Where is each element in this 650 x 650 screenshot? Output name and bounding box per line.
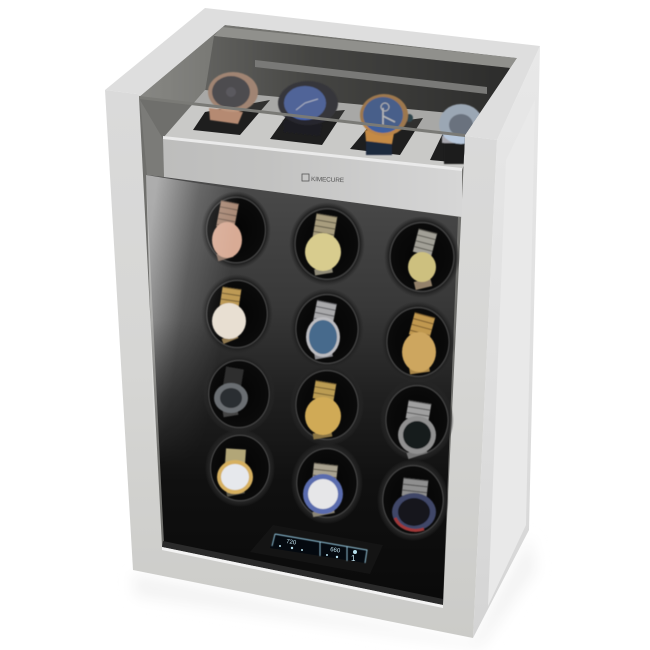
watches in winders <box>212 202 436 531</box>
rear shelf bar <box>255 60 487 94</box>
watch cushion slots <box>193 100 473 163</box>
watch: blue dial black case <box>277 81 339 125</box>
logo: KIMECURE <box>311 176 344 184</box>
touch control display <box>250 525 383 574</box>
winder sockets <box>201 191 460 541</box>
window glare <box>146 175 232 444</box>
watch row 3 <box>214 368 436 456</box>
touch control display: 720 <box>286 539 297 547</box>
cabinet right side <box>473 46 540 638</box>
smoked glass tint over top compartment <box>139 25 517 135</box>
watch: rose gold <box>208 72 258 124</box>
illustration: watch winder cabinet <box>105 8 540 638</box>
glass left strip <box>140 100 164 177</box>
floor shadow <box>133 536 536 648</box>
cabinet top frame <box>105 8 540 140</box>
watch: blue dial rose case <box>360 94 413 155</box>
touch control display: 1 <box>351 554 356 563</box>
display shelf top <box>163 90 482 170</box>
watch: skeleton light blue <box>439 104 483 164</box>
front frame <box>105 90 497 638</box>
touch control display: 660 <box>330 547 341 555</box>
lower black interior <box>146 175 458 603</box>
top watches <box>208 72 483 164</box>
upper shelf front with logo <box>163 136 462 217</box>
top glass front edge <box>139 96 465 137</box>
watch row 4 <box>217 449 436 531</box>
top glass compartment <box>139 25 517 170</box>
window interior <box>139 97 465 605</box>
watch row 2 <box>212 288 436 373</box>
watch row 1 <box>212 202 436 288</box>
window bottom ledge <box>162 541 443 605</box>
logo <box>302 174 344 184</box>
